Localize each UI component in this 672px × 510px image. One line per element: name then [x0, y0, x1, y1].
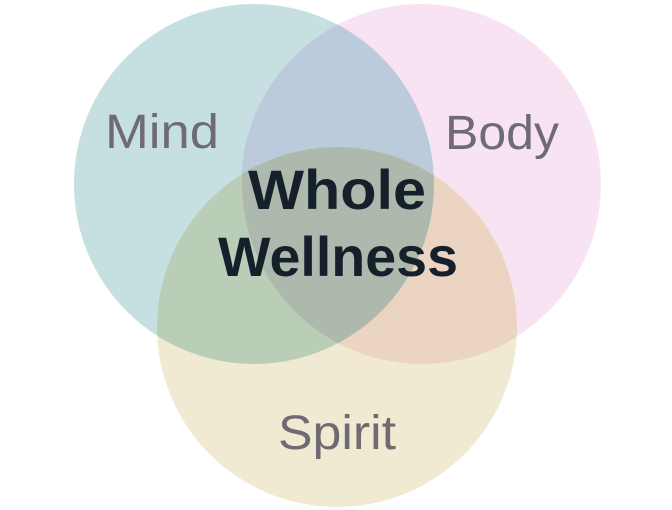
overlap: centre [242, 147, 434, 343]
circle: Spirit [157, 147, 517, 507]
label: Body: Body [445, 107, 559, 160]
title: Whole Wellness: Whole [248, 158, 426, 221]
title: Whole Wellness: Wellness [218, 225, 458, 288]
overlap: Body and Spirit [242, 147, 517, 364]
circle: Mind [74, 4, 434, 364]
circle: Body [241, 4, 601, 364]
overlap: Mind and Spirit [157, 174, 338, 364]
label: Mind: Mind [105, 106, 219, 159]
title: Whole Wellness [218, 158, 458, 288]
overlap: Mind and Body [241, 24, 434, 344]
venn diagram [74, 4, 601, 507]
label: Spirit: Spirit [278, 407, 396, 460]
